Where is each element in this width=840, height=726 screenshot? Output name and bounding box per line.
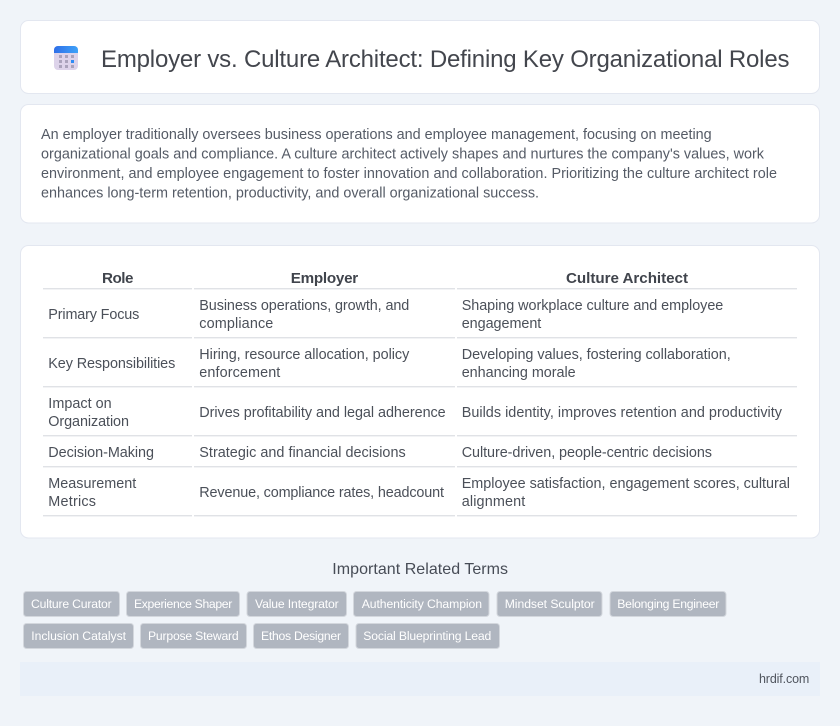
icon: calendar xyxy=(54,46,78,70)
table row: measurement metrics: Revenue, compliance rates, headcount xyxy=(199,485,444,501)
tag: Authenticity Champion xyxy=(362,597,482,611)
text block: introduction paragraph xyxy=(41,127,777,202)
heading: related terms: Important Related Terms xyxy=(332,561,508,578)
table header row: Employer xyxy=(291,270,358,287)
tag xyxy=(140,624,246,648)
table row: measurement metrics: alignment xyxy=(462,494,525,510)
table row: primary focus xyxy=(43,298,797,338)
tag: Value Integrator xyxy=(255,597,339,611)
table row: measurement metrics xyxy=(43,476,797,516)
tag xyxy=(24,624,134,648)
table row: key responsibilities: enhancing morale xyxy=(462,365,576,381)
table row: measurement metrics: Employee satisfaction, engagement scores, cultural xyxy=(462,476,790,492)
table row: measurement metrics: Measurement xyxy=(48,476,136,492)
tag xyxy=(126,592,240,616)
table row: measurement metrics: Metrics xyxy=(48,494,96,510)
tag xyxy=(356,624,500,648)
table row: primary focus: Business operations, growth, and xyxy=(199,298,409,314)
table row: key responsibilities: Key Responsibilities xyxy=(48,356,175,372)
table row: decision-making: Decision-Making xyxy=(48,445,154,461)
text block: introduction paragraph: An employer traditionally oversees business operations and employee management, focusing on meeting xyxy=(41,127,712,143)
table row: impact on organization: Builds identity, improves retention and productivity xyxy=(462,405,783,421)
footer xyxy=(20,662,820,696)
table row: impact on organization: Organization xyxy=(48,414,129,430)
tag xyxy=(24,592,120,616)
tag xyxy=(354,592,489,616)
table row: primary focus: Primary Focus xyxy=(48,307,139,323)
table row: impact on organization: Impact on xyxy=(48,396,112,412)
tag xyxy=(497,592,602,616)
table header row: Role xyxy=(102,270,134,287)
table row: primary focus: engagement xyxy=(462,316,541,332)
tag: Social Blueprinting Lead xyxy=(363,629,491,643)
tag: Culture Curator xyxy=(31,597,112,611)
title: Employer vs. Culture Architect: Defining Key Organizational Roles xyxy=(101,46,790,73)
tag: Inclusion Catalyst xyxy=(31,629,127,643)
text block: introduction paragraph: enhances long-term retention, productivity, and overall organizational success. xyxy=(41,186,539,202)
tag xyxy=(610,592,726,616)
table row: key responsibilities: Hiring, resource allocation, policy xyxy=(199,347,410,363)
tag xyxy=(254,624,348,648)
panel: introduction xyxy=(20,104,820,223)
table row: decision-making: Strategic and financial decisions xyxy=(199,445,406,461)
table row: impact on organization: Drives profitability and legal adherence xyxy=(199,405,446,421)
text block: introduction paragraph: environment, and employee engagement to foster innovation and collaboration. Prioritizing the culture architect role xyxy=(41,166,777,182)
table header row: Culture Architect xyxy=(566,270,688,287)
tag: Purpose Steward xyxy=(148,629,239,643)
table row: primary focus: compliance xyxy=(199,316,273,332)
table header row xyxy=(43,270,797,289)
table row: decision-making: Culture-driven, people-centric decisions xyxy=(462,445,712,461)
tag list: related terms xyxy=(24,592,726,648)
footer source text: hrdif.com xyxy=(759,672,809,686)
text block: introduction paragraph: organizational goals and compliance. A culture architect actively shapes and nurtures the company's values, work xyxy=(41,146,765,162)
table row: key responsibilities: Developing values, fostering collaboration, xyxy=(462,347,731,363)
tag: Experience Shaper xyxy=(134,597,232,611)
table row: key responsibilities xyxy=(43,347,797,387)
panel: title header xyxy=(20,20,820,94)
tag xyxy=(247,592,346,616)
table row: key responsibilities: enforcement xyxy=(199,365,280,381)
panel: comparison table xyxy=(20,246,820,538)
tag: Mindset Sculptor xyxy=(505,597,595,611)
table row: impact on organization xyxy=(43,396,797,436)
tag: Ethos Designer xyxy=(261,629,341,643)
tag: Belonging Engineer xyxy=(617,597,719,611)
table row: decision-making xyxy=(43,445,797,467)
table row: primary focus: Shaping workplace culture and employee xyxy=(462,298,723,314)
